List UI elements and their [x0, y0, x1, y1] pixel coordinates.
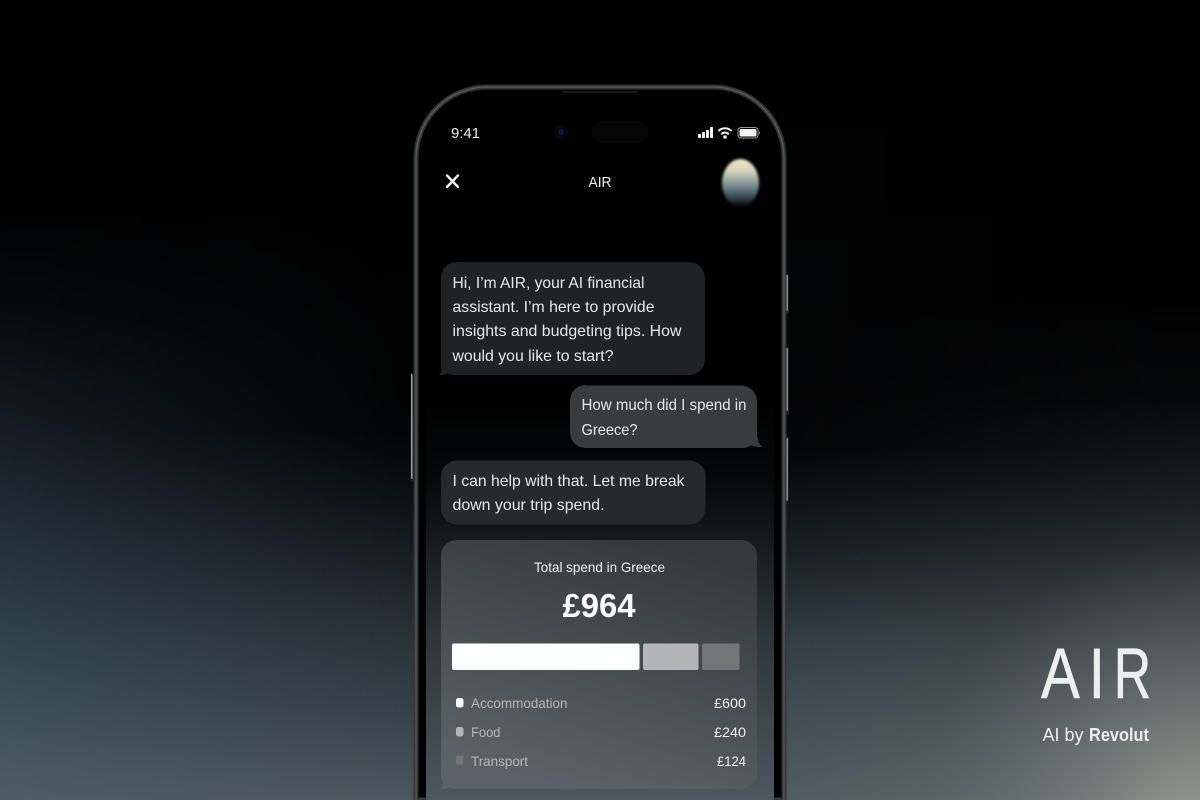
status bar: [451, 121, 760, 143]
message: AIR greeting: insights and budgeting tips. How: [452, 323, 682, 340]
phone side buttons: [410, 274, 789, 504]
tagline: Revolut: [1089, 725, 1149, 745]
legend: accommodation: Accommodation: [471, 695, 568, 711]
message: AIR reply: [441, 460, 706, 524]
avatar orb: [722, 159, 759, 207]
camera island: [554, 121, 648, 143]
tagline: [1042, 725, 1149, 745]
message: user question: Greece?: [582, 422, 638, 439]
signal icon: [698, 127, 713, 138]
phone screen: [426, 97, 774, 800]
legend: transport: [456, 753, 746, 769]
legend: transport: £124: [717, 753, 746, 769]
battery icon: [738, 128, 760, 138]
card heading: Total spend in Greece: [534, 559, 665, 575]
AIR wordmark: A: [1041, 633, 1080, 713]
message: AIR greeting: would you like to start?: [452, 348, 614, 365]
close icon: [447, 176, 458, 187]
brand logo: [1041, 633, 1151, 745]
stacked bar chart: [452, 644, 740, 670]
tagline: AI by: [1042, 725, 1084, 745]
phone frame: [416, 87, 784, 800]
legend: food: [456, 724, 746, 740]
legend: food: Food: [471, 724, 500, 740]
legend: accommodation: [456, 695, 746, 711]
screen title: AIR: [588, 174, 612, 191]
message: AIR greeting: assistant. I’m here to provide: [452, 299, 655, 316]
legend: food: £240: [714, 724, 746, 740]
AIR wordmark: [1041, 633, 1151, 714]
message: AIR greeting: [439, 262, 705, 375]
message: AIR reply: I can help with that. Let me break: [452, 473, 685, 490]
wifi icon: [719, 128, 731, 138]
time: 9:41: [451, 125, 480, 142]
total amount: £964: [562, 587, 636, 624]
AIR wordmark: R: [1114, 635, 1151, 714]
message: user question: [570, 385, 762, 448]
legend: transport: Transport: [471, 753, 528, 769]
phone: [410, 87, 789, 800]
spend card: [441, 540, 757, 789]
message: user question: How much did I spend in: [582, 397, 746, 414]
message: AIR reply: down your trip spend.: [452, 497, 604, 514]
AIR wordmark: I: [1089, 633, 1105, 713]
legend: accommodation: £600: [714, 695, 746, 711]
message: AIR greeting: Hi, I’m AIR, your AI financial: [452, 275, 644, 292]
